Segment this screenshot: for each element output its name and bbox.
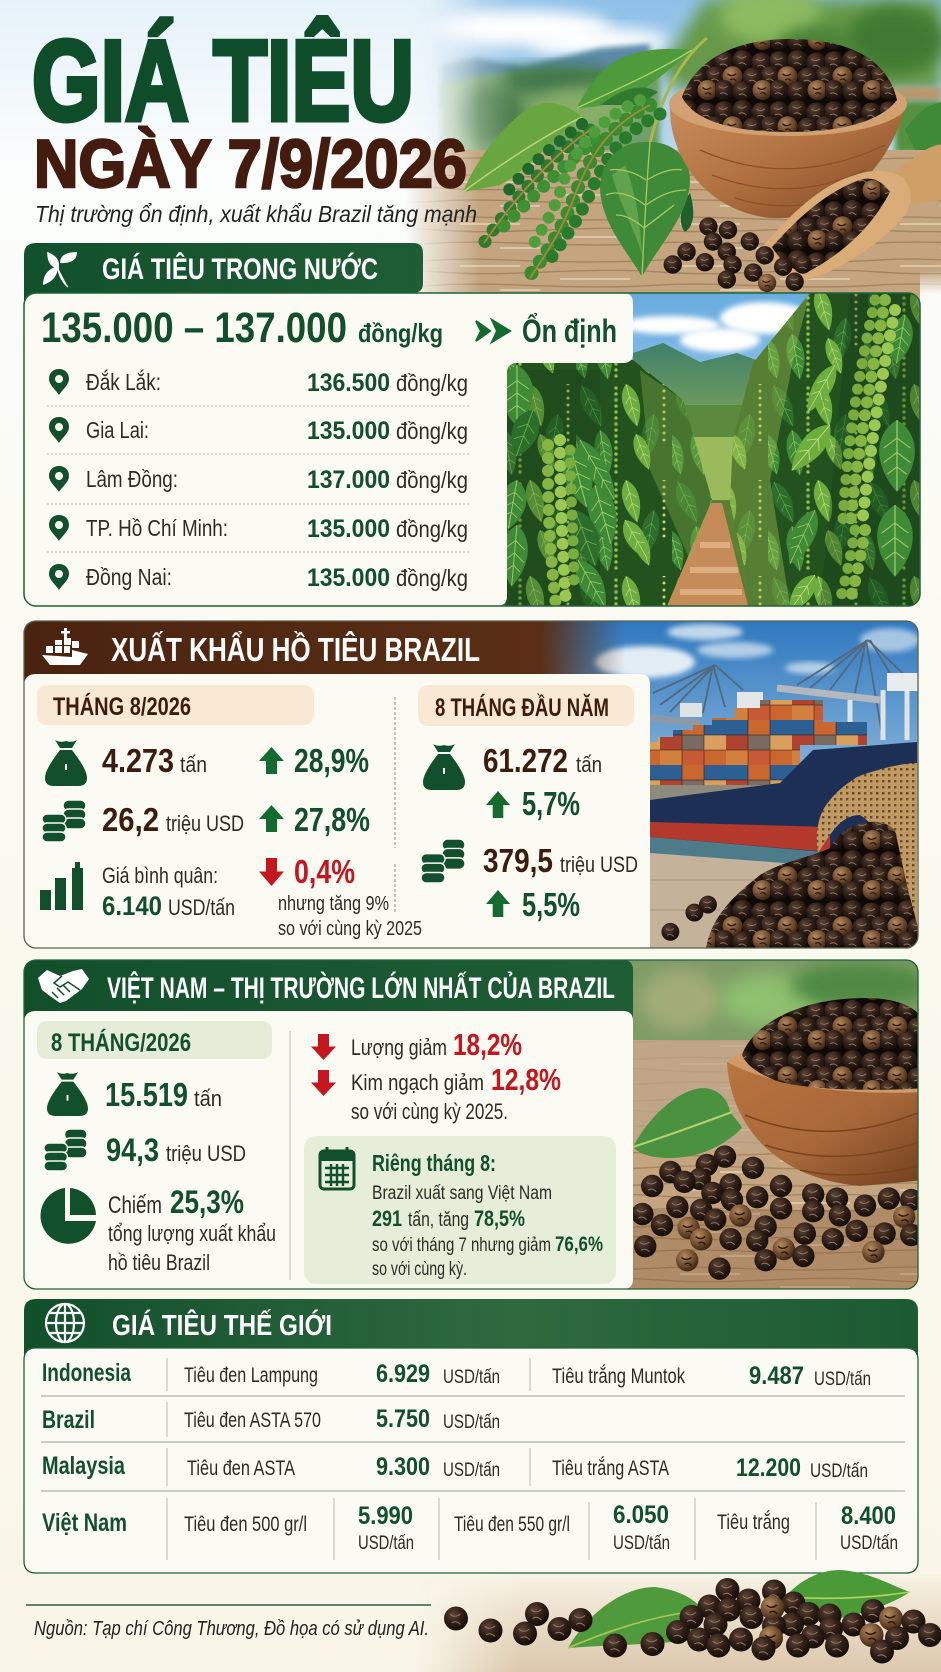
heading: Vietnam: VIỆT NAM – THỊ TRƯỜNG LỚN NHẤT CỦA BRAZIL	[107, 971, 615, 1005]
row: Indonesia: Tiêu trắng Muntok	[552, 1365, 685, 1388]
row: Brazil	[42, 1405, 500, 1434]
row: Vietnam: Việt Nam	[42, 1509, 127, 1537]
row: Indonesia: USD/tấn	[814, 1369, 871, 1390]
column: 8 months stats	[37, 1021, 276, 1275]
title: GIÁ TIÊU	[32, 18, 414, 145]
stat: value: 27,8%	[294, 801, 370, 838]
stat: volume: 28,9%	[294, 742, 369, 779]
stat: average price: 0,4%	[294, 853, 355, 890]
stat: value: triệu USD	[166, 1141, 246, 1166]
panel: Brazil export	[24, 621, 920, 950]
heading: export: XUẤT KHẨU HỒ TIÊU BRAZIL	[111, 631, 480, 668]
header bar: Vietnam	[24, 960, 633, 1025]
stat: share pie: tổng lượng xuất khẩu	[108, 1221, 276, 1246]
row: Vietnam: 5.990	[358, 1502, 413, 1530]
column: month 8	[37, 685, 422, 940]
stat: volume	[47, 1072, 222, 1116]
hero photo: landscape, table	[400, 0, 941, 300]
icon: globe	[46, 1304, 84, 1342]
stat: value: 5,5%	[522, 886, 580, 923]
hero: wooden bowl of black pepper	[669, 39, 907, 218]
stat: value: 94,3	[106, 1132, 159, 1168]
footer photo: peppercorns and leaves	[400, 1570, 941, 1672]
stat: value	[42, 800, 370, 842]
row: Indonesia: Tiêu đen Lampung	[184, 1364, 318, 1387]
row: Malaysia: USD/tấn	[443, 1460, 500, 1481]
stat: volume: tấn	[194, 1086, 222, 1111]
stat: average price: USD/tấn	[168, 895, 235, 920]
province list: Đồng Nai:	[86, 564, 172, 590]
stat: average price	[40, 853, 422, 940]
headline price	[41, 304, 617, 352]
province list: 135.000	[307, 417, 390, 445]
row: Vietnam: Tiêu đen 500 gr/l	[184, 1513, 307, 1536]
stat: average price: 6.140	[102, 891, 162, 921]
panel background	[24, 674, 650, 948]
callout: August: Brazil xuất sang Việt Nam	[372, 1183, 552, 1204]
province list: Lâm Đồng:	[86, 466, 178, 492]
heading: domestic: GIÁ TIÊU TRONG NƯỚC	[102, 252, 378, 286]
stat: volume	[423, 742, 602, 822]
hero: loose peppercorns on table	[664, 217, 812, 292]
stat: average price: Giá bình quân:	[102, 863, 218, 888]
row: Brazil: 5.750	[376, 1405, 430, 1433]
row: Vietnam: USD/tấn	[613, 1533, 670, 1554]
row: Vietnam: USD/tấn	[840, 1533, 898, 1554]
callout: August: 291	[372, 1206, 402, 1231]
row: Malaysia: USD/tấn	[810, 1461, 868, 1482]
row: Brazil: USD/tấn	[443, 1412, 500, 1433]
province list: 135.000	[307, 515, 390, 543]
province list: 137.000	[307, 466, 390, 494]
source line: Nguồn: Tạp chí Công Thương, Đồ họa có sử dụng AI.	[34, 1618, 429, 1640]
column: decline: 18,2%	[453, 1027, 522, 1062]
callout: August: so với tháng 7 nhưng giảm	[372, 1235, 551, 1256]
subtitle: Thị trường ổn định, xuất khẩu Brazil tăng mạnh	[35, 201, 477, 227]
row: Malaysia: 9.300	[376, 1453, 430, 1481]
province list: Gia Lai:	[86, 417, 149, 443]
callout: August: so với cùng kỳ.	[372, 1259, 467, 1280]
header: domestic	[24, 243, 423, 306]
heading: world: GIÁ TIÊU THẾ GIỚI	[112, 1308, 332, 1342]
row: Indonesia: USD/tấn	[443, 1367, 500, 1388]
province list: 136.500	[307, 369, 390, 397]
row: Vietnam: USD/tấn	[358, 1533, 414, 1554]
row: Vietnam: Tiêu trắng	[717, 1511, 790, 1534]
row: Indonesia: 9.487	[749, 1362, 804, 1390]
row: Malaysia	[42, 1452, 868, 1482]
stat: value: triệu USD	[166, 811, 244, 836]
stat: average price: nhưng tăng 9%	[278, 893, 389, 915]
panel: domestic price	[24, 243, 920, 617]
panel background	[24, 1348, 918, 1573]
stat: share pie: Chiếm	[108, 1192, 162, 1219]
photo: pepper bowl on table	[620, 960, 930, 1290]
province list: đồng/kg	[396, 565, 468, 591]
fade at hero bottom right	[920, 270, 941, 310]
province list: đồng/kg	[396, 516, 468, 542]
province list: Đắk Lắk:	[86, 369, 161, 395]
panel: Vietnam market	[24, 960, 930, 1290]
panel background	[24, 1011, 633, 1289]
province list: đồng/kg	[396, 467, 468, 493]
panel background	[24, 293, 633, 606]
cranes	[650, 640, 918, 740]
callout: August: 78,5%	[474, 1206, 525, 1231]
stat: volume: 4.273	[102, 742, 174, 779]
stat: value	[44, 1129, 246, 1171]
label pill	[37, 685, 314, 725]
label pill: 8 THÁNG/2026	[51, 1028, 191, 1057]
stat: volume: tấn	[576, 752, 602, 777]
stat: value: triệu USD	[560, 852, 638, 877]
icon: calendar	[320, 1147, 354, 1189]
headline price: 135.000 – 137.000	[41, 304, 347, 352]
date heading: NGÀY 7/9/2026	[34, 126, 467, 202]
label pill	[37, 1021, 272, 1059]
stat: volume: 5,7%	[522, 785, 580, 822]
row: Malaysia: Malaysia	[42, 1452, 126, 1480]
label pill	[418, 685, 634, 726]
header bar: world	[24, 1299, 918, 1360]
icon: sprout	[43, 252, 77, 287]
callout: August: 76,6%	[555, 1233, 603, 1256]
stat: share pie	[40, 1184, 276, 1275]
column: decline: so với cùng kỳ 2025.	[351, 1099, 508, 1124]
icon: handshake	[38, 969, 89, 1003]
province list: đồng/kg	[396, 418, 468, 444]
vine leaves, large	[495, 313, 916, 617]
panel border	[24, 293, 920, 606]
row: Indonesia: Indonesia	[42, 1359, 132, 1387]
headline price: đồng/kg	[358, 318, 443, 348]
green pepper chains	[548, 300, 895, 606]
row: Vietnam: Tiêu đen 550 gr/l	[454, 1513, 570, 1536]
row: Malaysia: Tiêu trắng ASTA	[552, 1457, 669, 1480]
row: Brazil: Brazil	[42, 1406, 95, 1434]
panel: world price	[24, 1299, 918, 1573]
province list	[47, 369, 469, 592]
callout: August: Riêng tháng 8:	[372, 1150, 496, 1176]
column: decline: 12,8%	[491, 1062, 561, 1097]
province list: 135.000	[307, 564, 390, 592]
header bar: export	[24, 621, 625, 690]
row: Vietnam: 6.050	[613, 1501, 669, 1529]
stat: value: 26,2	[102, 801, 159, 838]
row: Malaysia: 12.200	[736, 1454, 801, 1482]
column: decline	[311, 1027, 561, 1124]
row: Indonesia	[42, 1359, 871, 1390]
province list: đồng/kg	[396, 370, 468, 396]
stat: share pie: hồ tiêu Brazil	[108, 1250, 210, 1275]
price table	[41, 1358, 905, 1560]
row: Brazil: Tiêu đen ASTA 570	[184, 1409, 321, 1432]
stat: volume	[45, 740, 369, 786]
icon: cargo ship	[42, 628, 88, 665]
row: Malaysia: Tiêu đen ASTA	[187, 1457, 295, 1480]
stat: share pie: 25,3%	[170, 1184, 244, 1220]
photo: pepper farm rows	[495, 293, 920, 617]
stat: volume: 61.272	[483, 742, 568, 779]
row: Vietnam: 8.400	[841, 1502, 896, 1530]
callout: August: tấn, tăng	[408, 1209, 469, 1231]
stat: volume: 15.519	[105, 1076, 188, 1113]
callout: August	[304, 1136, 616, 1284]
row: Indonesia: 6.929	[376, 1360, 430, 1388]
photo: cargo ship port	[540, 621, 920, 950]
stat: value	[421, 839, 638, 923]
hero: pepper leaves and green spikes	[463, 38, 707, 278]
column: 8 months	[418, 685, 638, 923]
stat: volume: tấn	[180, 752, 207, 777]
stat: average price: so với cùng kỳ 2025	[278, 918, 422, 940]
column: decline: Lượng giảm	[351, 1035, 447, 1060]
stat: value: 379,5	[483, 842, 553, 879]
panel border	[24, 621, 918, 948]
province list: TP. Hồ Chí Minh:	[86, 515, 228, 541]
hero: wooden scoop	[762, 145, 941, 280]
column: decline: Kim ngạch giảm	[351, 1070, 484, 1095]
label pill: THÁNG 8/2026	[53, 692, 191, 721]
label pill: 8 THÁNG ĐẦU NĂM	[435, 693, 609, 722]
panel border	[24, 960, 918, 1289]
headline price: Ổn định	[522, 313, 617, 349]
row: Vietnam	[42, 1501, 898, 1554]
